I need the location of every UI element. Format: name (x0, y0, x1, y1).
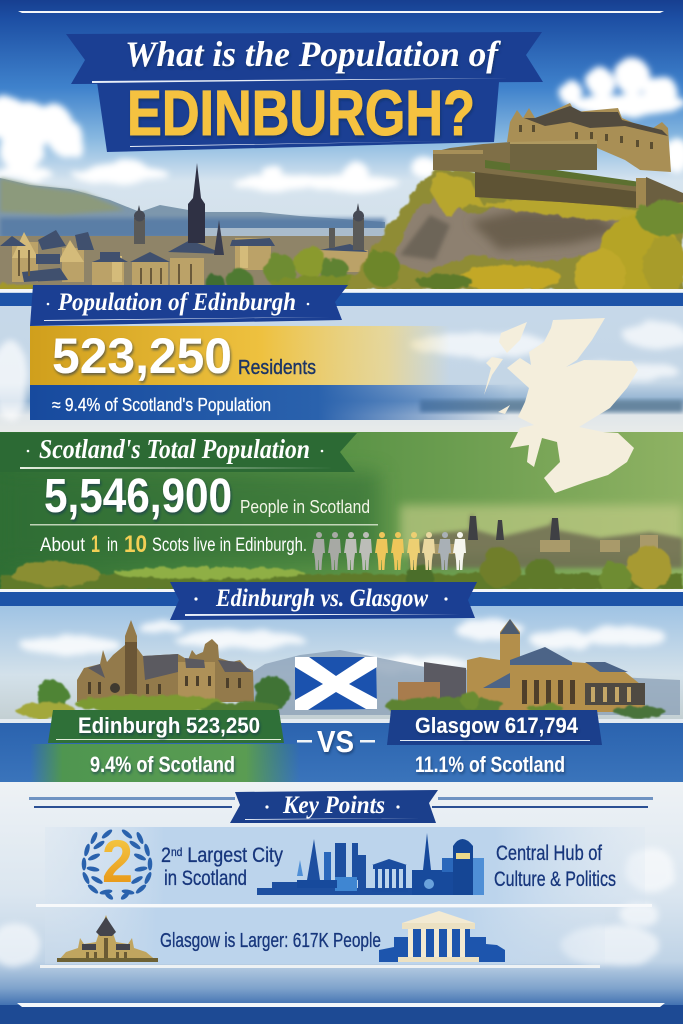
one in ten sentence: Scots live in Edinburgh. (152, 535, 307, 556)
trees: Edinburgh (15, 676, 290, 718)
clouds: versus panel (20, 620, 665, 672)
castle lower walls (433, 142, 640, 208)
text: second largest: in Scotland (164, 867, 247, 890)
castle keep (507, 103, 671, 172)
clouds: population panel (0, 321, 683, 420)
ribbon: Scotland's total population: Scotland's Total Population (39, 434, 310, 464)
label: Glasgow 617,794 (387, 710, 602, 745)
horizon band (420, 400, 683, 412)
title banner (66, 32, 543, 152)
ribbon: Scotland's total population (0, 433, 357, 472)
icons: ten people (312, 532, 466, 570)
text: central hub (494, 842, 616, 891)
panel: Scotland total background (0, 432, 683, 590)
text: second largest: Largest City (182, 844, 283, 867)
distant hill (240, 650, 680, 715)
foreground trees (0, 546, 683, 594)
label: Edinburgh 523,250 (48, 710, 284, 743)
scene: city skyline (0, 163, 390, 296)
band: residents figure (30, 326, 450, 385)
building: Edinburgh (15, 620, 290, 718)
bottom footer band (0, 1003, 683, 1024)
clouds: header sky (0, 58, 683, 192)
icon: blue temple (379, 911, 505, 962)
icon: Scottish flag (295, 657, 377, 710)
foliage (364, 200, 683, 301)
panel: Edinburgh population background (0, 292, 683, 432)
band: residents figure: 523,250 (52, 328, 232, 384)
label: Glasgow 617,794: Glasgow 617,794 (415, 713, 579, 738)
trees: Glasgow (385, 691, 666, 718)
text: second largest: nd (171, 845, 182, 859)
ribbon: Edinburgh vs Glasgow (170, 582, 477, 620)
church spire (188, 163, 205, 243)
band: residents figure: Residents (238, 357, 316, 379)
ribbon: key points (230, 790, 438, 823)
Scotland total block (0, 433, 466, 570)
castle terrace (510, 140, 597, 170)
title line 1: What is the Population of (125, 34, 501, 74)
ribbon: key points: Key Points (282, 792, 385, 819)
text: central hub: Culture & Politics (494, 868, 616, 891)
icon: blue skyline (257, 833, 484, 895)
VS mark: VS (317, 724, 354, 759)
text: central hub: Central Hub of (496, 842, 602, 865)
icon: laurel with 2 (81, 828, 153, 901)
background: header sky (0, 0, 683, 292)
total caption: People in Scotland (240, 497, 370, 517)
key points lines (29, 797, 653, 808)
one in ten sentence: 1 (91, 531, 100, 558)
VS mark (297, 724, 375, 759)
text: Glasgow larger: Glasgow is Larger: 617K People (160, 930, 381, 952)
title line 2: EDINBURGH? (127, 77, 475, 149)
label: Edinburgh 523,250: Edinburgh 523,250 (78, 713, 260, 738)
ribbon: population of Edinburgh: Population of Edinburgh (57, 289, 296, 316)
scene: Edinburgh Castle on rock (345, 103, 683, 301)
panel: key points background (0, 782, 683, 1006)
one in ten sentence: 10 (124, 531, 147, 558)
text: second largest (161, 844, 283, 890)
text: second largest: 2 (161, 844, 173, 867)
band: share of Scotland (30, 385, 510, 420)
Edinburgh share: 9.4% of Scotland (90, 752, 235, 777)
one in ten sentence (40, 531, 307, 558)
one in ten sentence: About (40, 535, 86, 556)
building: Glasgow (385, 619, 666, 718)
ribbon: population of Edinburgh (30, 285, 348, 326)
Glasgow share: 11.1% of Scotland (415, 752, 565, 777)
icon: tan building (57, 915, 158, 962)
band: versus heading (0, 589, 683, 606)
band: versus data background (0, 719, 683, 782)
population of Edinburgh block (30, 285, 510, 420)
total figure: 5,546,900 (44, 470, 232, 523)
ribbon: Edinburgh vs Glasgow: Edinburgh vs. Glasgow (215, 585, 428, 612)
one in ten sentence: in (107, 535, 118, 556)
panel: key point row two (45, 908, 605, 964)
trees (0, 246, 390, 296)
icon: laurel with 2: 2 (102, 828, 133, 895)
top rule (18, 11, 664, 13)
panel: versus sky (0, 606, 683, 721)
band: section rule (0, 289, 683, 306)
clouds: key points (0, 848, 675, 967)
panel: key point row one (45, 827, 645, 905)
map of Scotland (484, 318, 638, 493)
band: share of Scotland: ≈ 9.4% of Scotland's Population (52, 395, 271, 415)
distant town (410, 514, 683, 568)
